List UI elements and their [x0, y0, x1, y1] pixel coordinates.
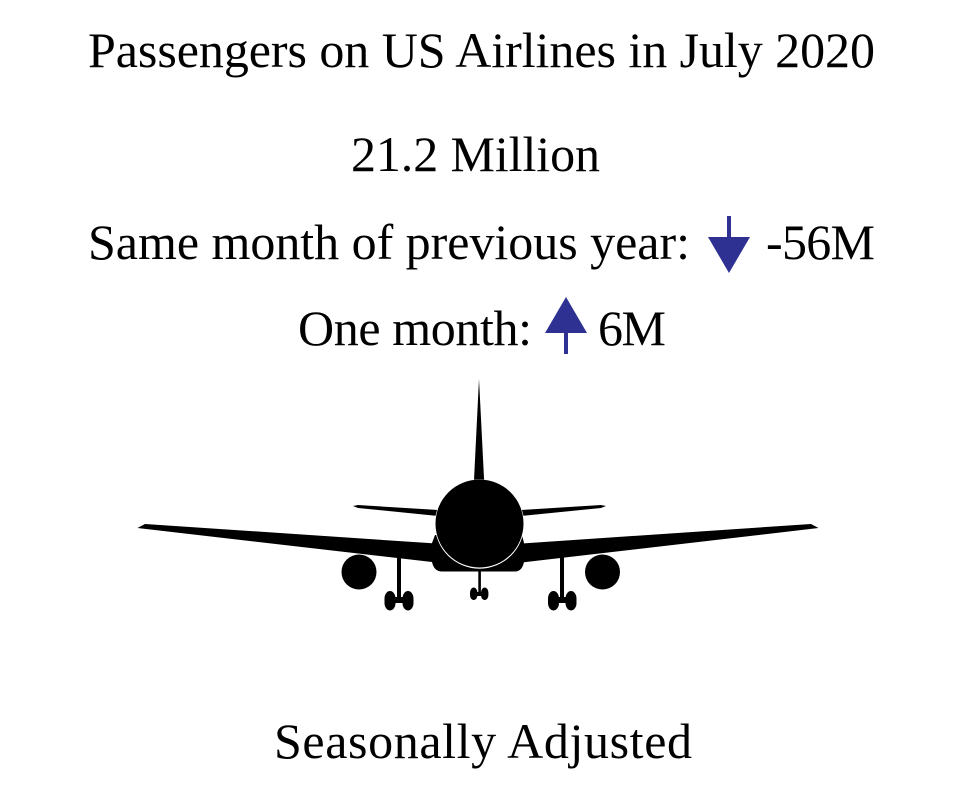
icon: up arrow	[545, 297, 587, 354]
right wing	[522, 524, 818, 562]
month over month value: 6M	[598, 300, 666, 356]
icon: down arrow	[708, 216, 750, 273]
right engine	[585, 554, 620, 590]
left engine	[342, 554, 376, 590]
title: Passengers on US Airlines in July 2020	[88, 22, 875, 78]
year over year value: -56M	[766, 214, 875, 270]
year over year label: Same month of previous year:	[88, 214, 690, 270]
left wing	[138, 524, 436, 562]
total passengers figure: 21.2 Million	[351, 126, 600, 182]
fuselage outline highlight	[435, 479, 524, 569]
right landing gear	[548, 556, 576, 610]
left landing gear	[384, 556, 414, 610]
month over month label: One month:	[298, 300, 532, 356]
lower fuselage	[432, 535, 524, 572]
nose landing gear	[470, 570, 488, 600]
year over year comparison	[88, 214, 875, 273]
left stabilizer	[353, 505, 438, 516]
footnote: seasonally adjusted: Seasonally Adjusted	[274, 713, 692, 769]
fuselage	[436, 480, 524, 568]
right stabilizer	[521, 505, 606, 516]
month over month comparison	[298, 297, 666, 356]
tail fin	[474, 379, 484, 484]
icon: airplane front view	[138, 379, 818, 610]
